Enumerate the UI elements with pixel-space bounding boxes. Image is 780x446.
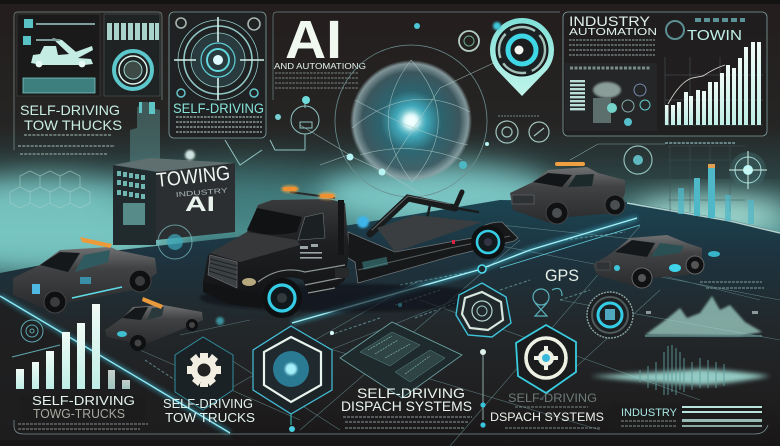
side stripes and step <box>258 265 345 293</box>
icon: tow truck silhouette <box>31 38 93 67</box>
icon: small ring <box>459 31 479 51</box>
icon: status chips <box>23 19 33 45</box>
caption: self-driving tow trucks (left): SELF-DRIVING <box>32 393 135 408</box>
truck: small flatbed <box>105 297 203 351</box>
progress bar <box>23 78 95 93</box>
floor <box>0 200 780 446</box>
bottom frame <box>14 420 768 434</box>
heading: industry automation <box>569 14 657 38</box>
label: AI: AI <box>185 193 215 216</box>
icon: robot node <box>225 96 319 165</box>
right lower chart <box>570 143 767 224</box>
front wheel <box>262 278 302 318</box>
icon: crosshair <box>729 151 767 189</box>
building: towing industry AI <box>113 150 235 245</box>
caption: self-driving tow trucks (center) <box>163 397 255 425</box>
skyscraper <box>130 102 160 165</box>
blue bed glow <box>357 216 369 228</box>
heading: self-driving tow thucks: TOW THUCKS <box>24 117 122 133</box>
rear wheel <box>471 225 505 259</box>
icon: gear hexagon <box>175 337 233 410</box>
icon: globe <box>300 23 500 206</box>
icon: ring gauge <box>114 51 152 89</box>
grille <box>208 255 237 288</box>
caption: self-driving tow trucks (center): SELF-DRIVING <box>163 397 253 411</box>
panel: AI and automation frame <box>273 10 560 100</box>
icon: target swirl <box>12 320 60 357</box>
hood panel <box>210 232 300 262</box>
label: towing: TOWING <box>155 162 231 192</box>
door window <box>298 213 325 240</box>
panel: self-driving radar <box>169 12 266 138</box>
caption: self-driving dspach systems (right) <box>490 391 604 428</box>
heading: self-driving tow thucks <box>20 102 122 133</box>
boom arm <box>370 192 478 234</box>
roof light bar <box>281 185 336 200</box>
door decals <box>300 244 322 259</box>
caption: self-driving tow trucks (left): TOWG-TRUCKS <box>33 406 125 421</box>
icon: ring pair <box>496 121 549 143</box>
caption: self-driving dspach systems (right): DSPACH SYSTEMS <box>490 410 604 424</box>
caption: self-driving dispach systems (center): DISPACH SYSTEMS <box>341 398 472 414</box>
icon: network globe <box>624 146 652 174</box>
icon: dial <box>587 292 633 338</box>
caption: self-driving dispach systems (center): SELF-DRIVING <box>357 385 465 401</box>
heading: industry automation: AUTOMATION <box>569 26 657 38</box>
headlight <box>242 278 256 286</box>
truck: left pickup <box>13 237 157 313</box>
bar chart: towing growth <box>665 42 763 125</box>
timeline connector <box>480 349 486 428</box>
truck: right pickup <box>510 162 625 224</box>
panel: industry legend <box>611 282 765 430</box>
dashboard mini panel <box>565 63 657 131</box>
heading: self-driving tow thucks: SELF-DRIVING <box>20 102 120 118</box>
car: right SUV <box>593 235 720 288</box>
heading: towin: TOWIN <box>687 27 742 44</box>
windshield <box>247 208 302 235</box>
dispatch circuit board <box>340 322 462 398</box>
icon: gps pin <box>533 288 562 316</box>
icon: large core hexagon <box>253 326 332 432</box>
icon: road hologram <box>158 225 192 259</box>
caption: self-driving tow trucks (left) <box>18 393 148 429</box>
label: GPS: GPS <box>545 266 579 285</box>
bumper <box>203 282 263 308</box>
bar chart: left growth <box>16 304 130 389</box>
flatbed <box>348 215 518 283</box>
chart: audio waveform <box>590 345 770 395</box>
heading: towin <box>666 20 745 44</box>
heading: AI: AI <box>285 10 342 70</box>
caption: self-driving tow trucks (center): TOW TRUCKS <box>165 411 255 425</box>
cab body <box>203 199 349 308</box>
caption: self-driving dispach systems (center) <box>341 385 472 428</box>
label: industry: INDUSTRY <box>176 187 228 199</box>
panel: industry legend: INDUSTRY <box>621 407 678 419</box>
truck: main tow truck <box>200 185 518 318</box>
subheading: and automationg: AND AUTOMATIONG <box>274 61 366 71</box>
exhaust stack <box>338 200 344 255</box>
bar strip <box>107 23 159 40</box>
shadow <box>200 284 500 312</box>
icon: radar target <box>174 17 264 100</box>
icon: hexagon settings <box>516 325 576 393</box>
heading: self-driving: SELF-DRIVING <box>173 101 264 116</box>
heading: industry automation: INDUSTRY <box>569 14 650 29</box>
honeycomb pattern <box>10 171 90 208</box>
icon: location pin <box>490 18 554 96</box>
icon: hexagon gauge <box>456 283 511 337</box>
glowing route lines <box>0 218 640 433</box>
panel: self-driving tow trucks (top left) <box>14 12 162 154</box>
panel: industry automation <box>563 12 767 136</box>
chart: mountain waveform <box>645 296 762 336</box>
caption: self-driving dspach systems (right): SELF-DRIVING <box>508 391 597 405</box>
